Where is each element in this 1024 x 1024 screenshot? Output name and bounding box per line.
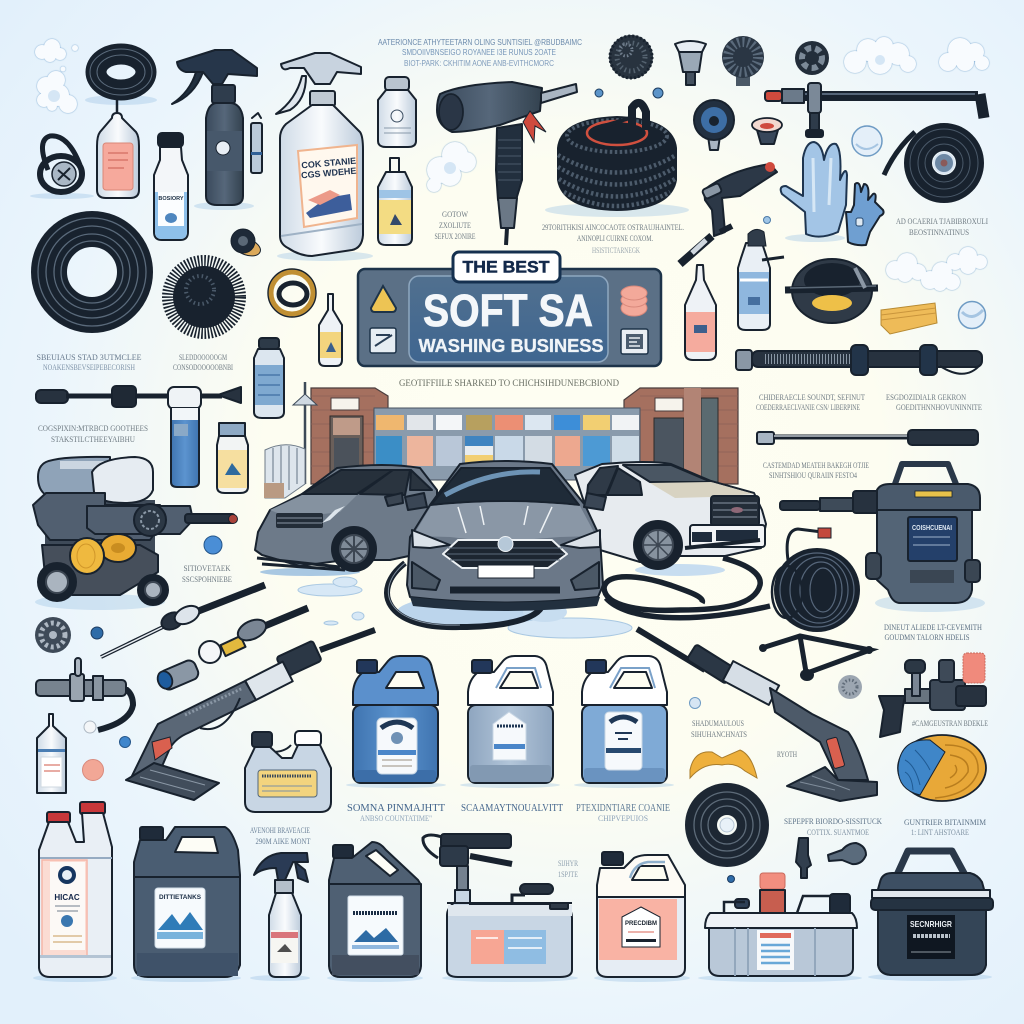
caption below unit: [884, 622, 982, 642]
jug: white over grey-blue: [460, 656, 560, 788]
jug: blue: [346, 656, 446, 788]
icon: straight wand: [757, 430, 978, 445]
icon: big white spray bottle: CGS WDEHE: [301, 166, 357, 180]
captions under jugs: CHIPVEPUIOS: [598, 813, 648, 823]
icon: right big wand: [637, 629, 877, 801]
right tower: [624, 388, 738, 484]
icon: bottle with blue label: [154, 133, 188, 240]
icon: gold ring: [268, 269, 316, 317]
heading tab: THE BEST: [462, 258, 550, 276]
icon: yarn ball: [898, 735, 986, 801]
captions under jugs: PTEXIDNTIARE COANIE: [576, 803, 670, 814]
caption right of gloves: BEOSTINNATINUS: [909, 227, 969, 237]
icon: ring handle: [785, 259, 878, 323]
icon: bottle cap: [231, 229, 263, 259]
lamp post and towels: [264, 382, 317, 498]
caption near coil: GUNTRIER BITAINMIM: [904, 817, 986, 827]
icon: portable pressure unit: COISHCUENAI: [912, 523, 952, 532]
caption below unit: DINEUT ALIEDE LT-CEVEMITH: [884, 622, 982, 632]
icon: black case: [868, 851, 993, 981]
caption left hose: NOAKENSBEVSEIPEBECORISH: [43, 362, 135, 372]
captions under jugs: [347, 803, 670, 823]
caption beside sprayer: 1SPJTE: [558, 869, 578, 879]
icon: small vial: [251, 113, 262, 173]
icon: pipe fitting: [36, 658, 133, 733]
caption below hose pile: 29TORITHKISI AINCOCAOTE OSTRAUJHAINTEL.: [542, 222, 684, 232]
icon: warning triangle: [371, 286, 396, 312]
hoses around cars: [387, 558, 770, 627]
icon: long hose wand right: [736, 345, 982, 375]
caption below straight wand: SINHTSHIOU QURAIIN FESTO4: [769, 470, 858, 480]
caption above pressure washer: [38, 423, 148, 444]
icon: thin wand: [101, 585, 265, 657]
caption below spiky ball: SLEDDOOOOOGM: [179, 352, 227, 362]
captions under jugs: SOMNA PINMAJHTT: [347, 803, 445, 814]
caption top centre: [378, 38, 582, 68]
shop windows: [374, 408, 640, 480]
caption right of gloves: AD OCAERIA TJABIBROXULI: [896, 216, 988, 226]
icon: small yellow bottle: [319, 294, 342, 366]
icon: small glove: [846, 183, 884, 245]
caption beside gun: GOTOW: [442, 209, 468, 219]
captions below right wand: GOEDITHNNHOVUNINNITE: [896, 402, 982, 412]
icon: pink stack: [621, 286, 647, 316]
caption below hose pile: [542, 222, 684, 255]
icon: bubble: [958, 302, 986, 328]
icon: pressure washer machine: [33, 457, 238, 610]
caption right of gloves: [896, 216, 988, 237]
caption near coil: SEPEPFR BIORDO-SISSITUCK: [784, 816, 883, 826]
icon: wand with gold collar: [155, 608, 308, 692]
caption above storefront: GEOTIFFIILE SHARKED TO CHICHSIHDUNEBCBIOND: [399, 378, 619, 388]
icon: bubble: [690, 698, 700, 708]
jug: dark with diagonal handle: [327, 842, 423, 982]
jug: white and pink: PRECDIBM: [625, 920, 657, 927]
caption near coil: [784, 816, 986, 837]
caption beside blue ball: [182, 563, 232, 584]
captions below right wand: [756, 392, 982, 412]
heading tab: [453, 252, 560, 282]
blue dot: [728, 876, 734, 882]
captions under jugs: ANBSO COUNTATIME": [360, 813, 432, 823]
caption below spiky ball: CONSODOOOOOBNBI: [173, 362, 233, 372]
caption near chamois: SHADUMAULOUS: [692, 718, 744, 728]
icon: small bottle: [378, 77, 416, 147]
caption near chamois: SIHUHANCHNATS: [691, 729, 747, 739]
storefront: [311, 388, 738, 486]
icon: square tool: [370, 328, 396, 353]
title panel: [358, 252, 661, 366]
icon: small jug: [245, 731, 331, 812]
caption top centre: BIOT-PARK: CKHITIM AONE ANB-EVITHCMORC: [404, 59, 554, 68]
captions below right wand: ESGDOZIDIALR GEKRON: [886, 392, 966, 402]
icon: small white bottle: [37, 714, 66, 793]
caption top centre: SMDOIIVBNSEIGO ROYANEE I3E RUNUS 2OATE: [402, 48, 556, 57]
textured ball: [838, 675, 862, 699]
icon: hose ring: [85, 49, 157, 116]
caption beside sprayer: SIJHYR: [558, 858, 578, 868]
icon: yellow chamois: [690, 750, 757, 778]
captions below right wand: COEDERRAECLVANIE CSN/ LIBERPINE: [756, 402, 860, 412]
car: centre front sedan: [405, 461, 606, 611]
caption near chamois: [691, 718, 797, 759]
bottle: white with red caps: HICAC: [54, 893, 80, 902]
cloud: [427, 142, 476, 192]
icon: hose loop: [30, 136, 94, 199]
blue dot: [91, 627, 103, 639]
caption top centre: AATERIONCE ATHYTEETARN OLING SUNTISIEL @RBUDBAIMC: [378, 38, 582, 47]
left tower: [311, 388, 388, 486]
sub heading: WASHING BUSINESS: [418, 336, 604, 356]
icon: bottle with pink label: [97, 113, 139, 198]
caption beside sprayer: [558, 858, 578, 879]
icon: small bottle spray bottom row: [250, 853, 310, 981]
caption left hose: [36, 352, 142, 372]
caption below hose pile: HSISTICTARNEGK: [592, 245, 641, 255]
icon: angled spray gun: [680, 162, 777, 264]
icon: black case: SECNRHIGR: [910, 919, 952, 929]
jug: white over blue: [574, 656, 674, 788]
caption below unit: GOUDMN TALORN HDELIS: [884, 632, 970, 642]
icon: round nozzle: [694, 100, 734, 150]
icon: large glove: [781, 142, 847, 242]
icon: pink label bottle: [685, 265, 716, 360]
caption beside gun: SEFUX 2ONIRE: [434, 231, 476, 241]
icon: big white spray bottle: COK STANIE: [301, 156, 356, 170]
blue bubble: [120, 736, 130, 748]
car: left grey hatchback: [255, 465, 437, 571]
captions below right wand: CHIDERAECLE SOUNDT, SEFINUT: [759, 392, 866, 402]
panel body: [358, 269, 661, 366]
icon: big soft-wash wand left: [126, 630, 375, 800]
caption below spiky ball: [173, 352, 233, 372]
caption above spray: [250, 825, 311, 846]
icon: blue label bottle: [254, 338, 284, 418]
icon: spiky ball: [168, 261, 240, 333]
icon: QR square: [621, 329, 648, 354]
caption left hose: SBEUIAUS STAD 3UTMCLEE: [36, 352, 142, 362]
caption below straight wand: [763, 460, 869, 480]
caption above spray: 290M AIKE MONT: [256, 836, 311, 846]
icon: yellow-label bottle: [378, 158, 412, 245]
icon: hose reel: [759, 528, 873, 681]
clouds top-right: [844, 37, 989, 74]
blue ball: [204, 536, 222, 554]
icon: dark spray bottle: [172, 50, 257, 210]
icon: clear bottle with blue label: [738, 229, 784, 330]
bottle: white with red caps: [33, 802, 117, 982]
clouds right: [886, 247, 987, 291]
icon: flat black coil: [694, 792, 760, 858]
caption below straight wand: CASTEMDAD MEATEH BAKEGH OTJIE: [763, 460, 869, 470]
caption beside pipe tool: #CAMGEUSTRAN BDEKLE: [912, 718, 988, 728]
icon: flat hose coil: [884, 129, 978, 197]
icon: T-wand: [765, 83, 984, 137]
clouds top-left: [35, 39, 78, 113]
icon: sponge: [881, 303, 937, 334]
icons: spiked balls and nozzles: [609, 35, 829, 86]
caption beside gun: [434, 209, 476, 241]
jug: white and pink: [594, 852, 690, 982]
icon: bottle with blue label: BOSIORY: [158, 196, 184, 202]
caption near coil: COTTIX. SUANTMOE: [807, 827, 869, 837]
jug: dark with mountain label: [131, 827, 241, 982]
caption near coil: 1: LINT AHSTOARE: [911, 827, 969, 837]
icon: white tank container: [698, 873, 862, 982]
icon: spray gun: [437, 82, 577, 245]
caption beside gun: ZXOLIUTE: [439, 220, 471, 230]
icon: small nozzle and bulb: [796, 838, 866, 878]
puddles: [260, 564, 725, 638]
icon: cream label bottle: [217, 423, 248, 493]
textured ball: [35, 617, 71, 653]
pink ball: [82, 760, 104, 780]
caption near chamois: RYOTH: [777, 749, 797, 759]
caption below hose pile: ANINOPLI CUIRNE COXOM.: [577, 233, 653, 243]
caption above pressure washer: COGSPIXIN:MTRBCD GOOTHEES: [38, 423, 148, 433]
bubbles near coil: [595, 88, 663, 98]
icon: bubble: [852, 126, 882, 156]
icon: pump sprayer tank: [423, 834, 578, 982]
main heading: SOFT SA: [423, 285, 593, 336]
icon: big hose circle: [38, 218, 146, 326]
icon: big white spray bottle: [276, 53, 373, 261]
captions under jugs: SCAAMAYTNOUALVITT: [461, 803, 563, 814]
icon: portable pressure unit: [780, 464, 985, 612]
icon: small cup nozzle: [752, 118, 782, 144]
car: right white pickup: [575, 462, 766, 569]
caption beside blue ball: SSCSPOHNIEBE: [182, 574, 232, 584]
inner plate: [409, 276, 608, 362]
caption above spray: AVENOHI BRAVEACIE: [250, 825, 310, 835]
icon: blue bottle on wand: [168, 387, 201, 487]
icon: wand left: [36, 386, 241, 407]
jug: dark with mountain label: DITTIETANKS: [159, 894, 202, 901]
caption above pressure washer: STAKSTILCTHEEYAIBHU: [51, 434, 135, 444]
icon: coiled hose pile: [545, 103, 689, 217]
caption beside blue ball: SITIOVETAEK: [184, 563, 231, 573]
icon: pipe tool: [879, 653, 986, 737]
